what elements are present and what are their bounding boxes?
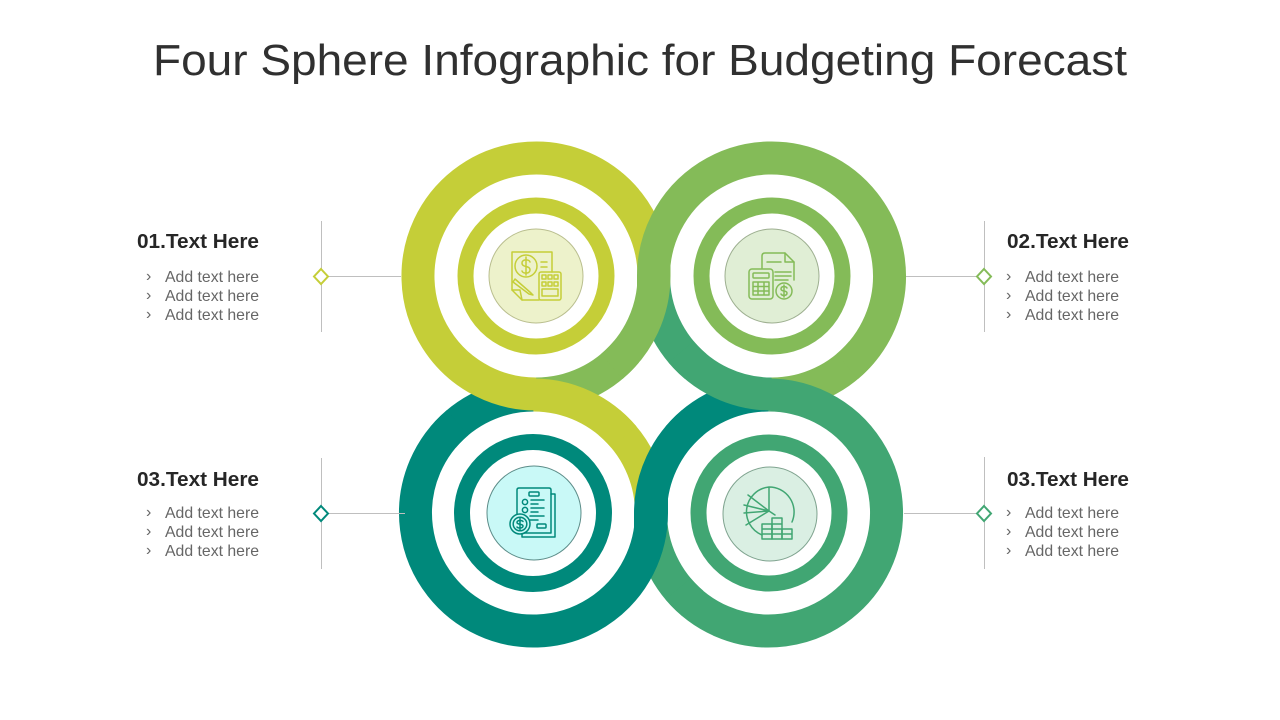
bullet list 2 xyxy=(1006,268,1119,324)
icon disc 1 xyxy=(489,229,583,323)
inner ring 1 xyxy=(466,206,606,346)
bullet list 3: › xyxy=(146,523,151,540)
ribbon ends passing underneath xyxy=(443,186,862,603)
bullet list 1: Add text here xyxy=(165,288,259,305)
inner ring 3 xyxy=(462,442,604,584)
connector 1 xyxy=(314,221,401,332)
heading 2: 02.Text Here xyxy=(1007,231,1129,253)
connector 3 xyxy=(314,458,405,569)
bullet list 3: Add text here xyxy=(165,505,259,522)
bullet list 3 xyxy=(146,504,259,560)
sphere 4 centre xyxy=(698,442,840,584)
bullet list 2: Add text here xyxy=(1025,307,1119,324)
icon: pie chart and coin stacks xyxy=(744,487,794,539)
inner ring 2 xyxy=(702,206,842,346)
bullet list 1: Add text here xyxy=(165,269,259,286)
bullet list 1: Add text here xyxy=(165,307,259,324)
bullet list 4: Add text here xyxy=(1025,543,1119,560)
diamond 4 xyxy=(977,506,991,521)
green ribbon xyxy=(612,158,890,366)
connector 2 xyxy=(906,221,991,332)
bullet list 4: Add text here xyxy=(1025,505,1119,522)
bullet list 2: › xyxy=(1006,287,1011,304)
text block 4 xyxy=(1006,469,1129,560)
icon disc 4 xyxy=(723,467,817,561)
bullet list 4 xyxy=(1006,504,1119,560)
bullet list 1: › xyxy=(146,306,151,323)
yellow ribbon xyxy=(418,158,626,437)
bullet list 3: › xyxy=(146,542,151,559)
bullet list 1: › xyxy=(146,268,151,285)
bullet list 4: › xyxy=(1006,523,1011,540)
connector 4 xyxy=(904,457,991,569)
icon disc 3 xyxy=(487,466,581,560)
bullet list 2: Add text here xyxy=(1025,269,1119,286)
bullet list 1 xyxy=(146,268,259,324)
bullet list 2: › xyxy=(1006,306,1011,323)
text block 3 xyxy=(137,469,259,560)
icon: report and coin xyxy=(510,488,555,537)
heading 4: 03.Text Here xyxy=(1007,469,1129,491)
teal ribbon xyxy=(416,423,693,631)
sphere 1 centre xyxy=(466,206,606,346)
bullet list 4: Add text here xyxy=(1025,524,1119,541)
diamond 3 xyxy=(314,506,328,521)
heading 3: 03.Text Here xyxy=(137,469,259,491)
title: Four Sphere Infographic for Budgeting Forecast xyxy=(153,36,1127,85)
bullet list 3: › xyxy=(146,504,151,521)
diamond 2 xyxy=(977,269,991,284)
text block 1 xyxy=(137,231,259,324)
bullet list 3: Add text here xyxy=(165,524,259,541)
bullet list 2: › xyxy=(1006,268,1011,285)
bullet list 4: › xyxy=(1006,504,1011,521)
icon disc 2 xyxy=(725,229,819,323)
diamond 1 xyxy=(314,269,328,284)
inner ring 4 xyxy=(698,442,840,584)
bullet list 3: Add text here xyxy=(165,543,259,560)
icon: calculator, invoice and coin xyxy=(749,253,794,299)
text block 2 xyxy=(1006,231,1129,324)
bullet list 2: Add text here xyxy=(1025,288,1119,305)
icon: budget document with calculator xyxy=(512,252,561,300)
heading 1: 01.Text Here xyxy=(137,231,259,253)
bullet list 4: › xyxy=(1006,542,1011,559)
sphere 2 centre xyxy=(702,206,842,346)
interlocking ribbon rings xyxy=(416,158,890,631)
mid green ribbon xyxy=(678,352,887,631)
sphere 3 centre xyxy=(462,442,604,584)
bullet list 1: › xyxy=(146,287,151,304)
